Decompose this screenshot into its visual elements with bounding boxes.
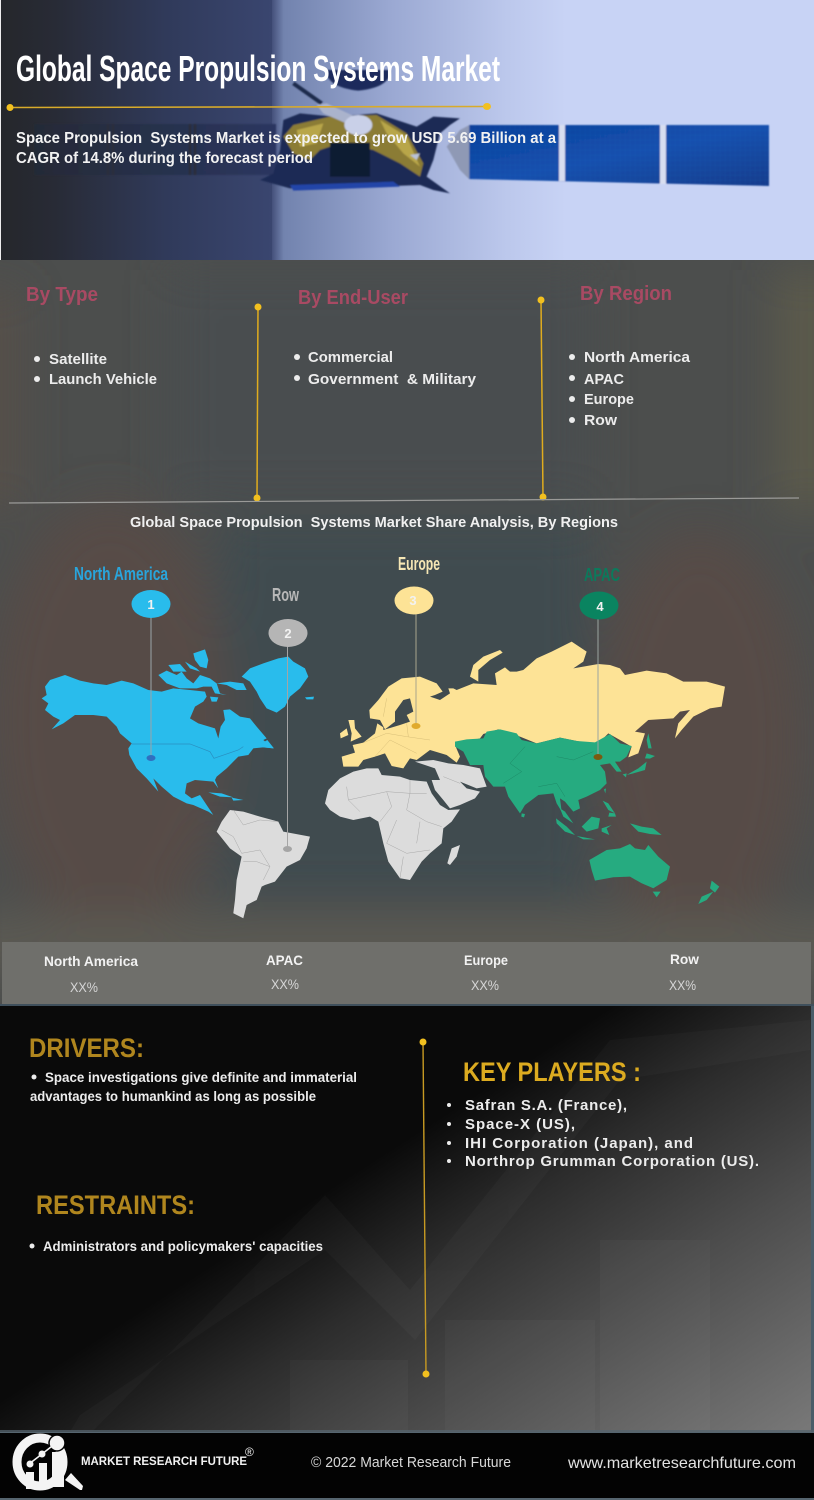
list: region segments: Europe [584, 391, 634, 408]
world map [42, 642, 725, 918]
text: copyright: © 2022 Market Research Future [311, 1454, 511, 1471]
callout: Row: Row [272, 585, 300, 605]
panel: segmentation and map background [0, 260, 814, 1006]
text: brand name: MARKET RESEARCH FUTURE [81, 1454, 247, 1468]
divider: type / end-user [254, 304, 262, 502]
callout: APAC: APAC [584, 565, 620, 585]
list: type segments: Launch Vehicle [49, 371, 157, 388]
intro text [16, 130, 556, 167]
list: end-user segments: Government & Military [308, 371, 477, 388]
text: drivers content: advantages to humankind as long as possible [30, 1088, 316, 1104]
callout: North America [74, 564, 170, 761]
icon: Market Research Future logo [17, 1435, 83, 1490]
divider: drivers / key players [420, 1038, 430, 1378]
callout: North America: 1 [147, 597, 155, 612]
callout: North America: North America [74, 564, 169, 584]
panel: drivers, restraints and key players [0, 1006, 814, 1490]
list: key players: Space-X (US), [465, 1116, 575, 1133]
column: North America: North America [44, 953, 138, 969]
text: website: www.marketresearchfuture.com [567, 1455, 796, 1472]
panel: regional share table [0, 942, 814, 1005]
callout: Row: 2 [284, 626, 292, 641]
callout: APAC [580, 565, 620, 760]
column: North America [44, 953, 138, 995]
panel: header banner [0, 0, 814, 260]
callout: Europe [394, 554, 440, 729]
title divider line [6, 103, 491, 111]
column: North America: XX% [70, 979, 98, 995]
column: Row: Row [670, 951, 699, 967]
heading: By Region: By Region [580, 283, 672, 305]
callout: Europe: Europe [398, 554, 440, 574]
list: type segments [34, 351, 157, 388]
icon: satellite [34, 70, 769, 193]
panel: footer [0, 1432, 814, 1500]
column: APAC: XX% [271, 976, 299, 992]
heading: Restraints: RESTRAINTS: [36, 1190, 195, 1220]
list: region segments: APAC [584, 371, 624, 388]
column: Row [669, 951, 699, 993]
list: region segments: Row [584, 412, 617, 429]
column: Row: XX% [669, 977, 696, 993]
intro text: CAGR of 14.8% during the forecast period [16, 150, 313, 167]
text: drivers content [30, 1069, 357, 1104]
column: Europe [464, 952, 508, 993]
list: end-user segments: Commercial [308, 349, 393, 366]
callout: Europe: 3 [409, 593, 417, 608]
list: key players [447, 1097, 759, 1170]
callout: APAC: 4 [596, 599, 604, 614]
list: key players: IHI Corporation (Japan), and [465, 1135, 693, 1152]
column: Europe: Europe [464, 952, 508, 968]
list: region segments [569, 349, 691, 429]
heading: market share analysis: Global Space Propulsion Systems Market Share Analysis, By Regions [130, 514, 618, 531]
column: Europe: XX% [471, 977, 499, 993]
map: Asia Pacific [455, 729, 719, 904]
list: end-user segments [294, 349, 477, 388]
callout: Row [268, 585, 308, 852]
map: Africa and Middle East [325, 760, 487, 880]
text: drivers content: Space investigations give definite and immaterial [45, 1069, 357, 1085]
map: North America [42, 649, 314, 815]
list: key players: Northrop Grumman Corporation (US). [465, 1153, 759, 1170]
map: Europe and Russia [340, 642, 725, 768]
text: restraints content: Administrators and policymakers' capacities [43, 1238, 323, 1254]
list: type segments: Satellite [49, 351, 107, 368]
intro text: Space Propulsion Systems Market is expected to grow USD 5.69 Billion at a [16, 130, 556, 147]
heading: By Type: By Type [26, 284, 98, 306]
list: region segments: North America [584, 349, 691, 366]
heading: Key Players: KEY PLAYERS : [463, 1057, 641, 1087]
column: APAC: APAC [266, 952, 303, 968]
list: key players: Safran S.A. (France), [465, 1097, 627, 1114]
map: South America [217, 810, 310, 918]
text: registered mark: ® [245, 1445, 254, 1459]
heading: By End-User: By End-User [298, 287, 408, 309]
title: Global Space Propulsion Systems Market [16, 48, 500, 89]
column: APAC [266, 952, 303, 992]
heading: Drivers: DRIVERS: [29, 1033, 144, 1063]
divider: end-user / region [538, 296, 546, 500]
